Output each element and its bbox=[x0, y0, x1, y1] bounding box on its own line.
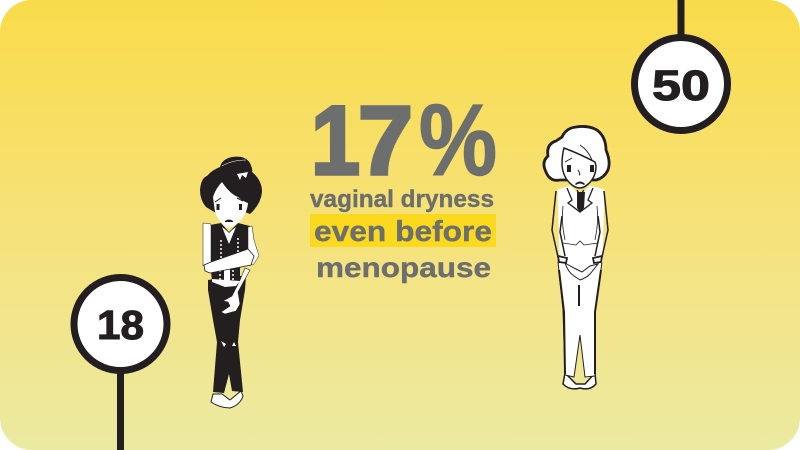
age marker: 50: 50 bbox=[652, 62, 710, 110]
statistic: 17%: 1 bbox=[311, 86, 360, 195]
cuffs bbox=[558, 256, 602, 263]
highlight: even before: even before bbox=[314, 216, 492, 248]
face bbox=[213, 182, 248, 227]
crossed forearm bbox=[204, 249, 254, 273]
chest bbox=[222, 227, 236, 281]
left upper arm bbox=[203, 223, 211, 266]
trouser shading bbox=[559, 270, 601, 374]
torso and vest bbox=[210, 223, 250, 281]
arms bbox=[552, 191, 608, 257]
age marker: 18: 18 bbox=[97, 302, 144, 348]
statistic: 17%: 7 bbox=[358, 86, 413, 195]
collar tie bbox=[577, 192, 585, 212]
knee highlights bbox=[221, 341, 236, 347]
eyebrows and nose bbox=[565, 158, 595, 175]
shoes bbox=[563, 373, 596, 389]
face bbox=[562, 148, 596, 188]
blazer hem bbox=[563, 241, 598, 245]
hand bbox=[221, 268, 250, 314]
bun band bbox=[222, 160, 246, 166]
trousers bbox=[558, 262, 602, 377]
fringe strand bbox=[580, 145, 592, 160]
waist band bbox=[212, 279, 240, 287]
statistic: 17% bbox=[311, 84, 497, 196]
hair highlight bbox=[237, 172, 248, 180]
hands bbox=[565, 263, 598, 280]
eyes and mouth bbox=[567, 165, 594, 185]
caption line: menopause: menopause bbox=[316, 252, 491, 283]
eyes and mouth bbox=[216, 204, 242, 222]
figure: young woman, age 18 bbox=[200, 157, 262, 408]
hair bbox=[544, 126, 609, 180]
vest studs bbox=[220, 238, 238, 282]
blazer waist contour bbox=[562, 206, 598, 240]
blazer bbox=[558, 186, 604, 262]
caption line: vaginal dryness: vaginal dryness bbox=[310, 186, 494, 213]
shoes bbox=[211, 391, 243, 408]
figure: older woman, age 50 bbox=[544, 126, 609, 389]
age marker: 50 bbox=[634, 0, 728, 130]
statistic: 17%: % bbox=[419, 84, 497, 196]
hair and bun bbox=[200, 157, 262, 214]
collar lapels bbox=[567, 188, 593, 212]
right upper arm bbox=[248, 226, 259, 265]
eyebrows bbox=[215, 198, 243, 202]
age marker: 18 bbox=[74, 278, 167, 450]
trousers bbox=[208, 276, 246, 393]
